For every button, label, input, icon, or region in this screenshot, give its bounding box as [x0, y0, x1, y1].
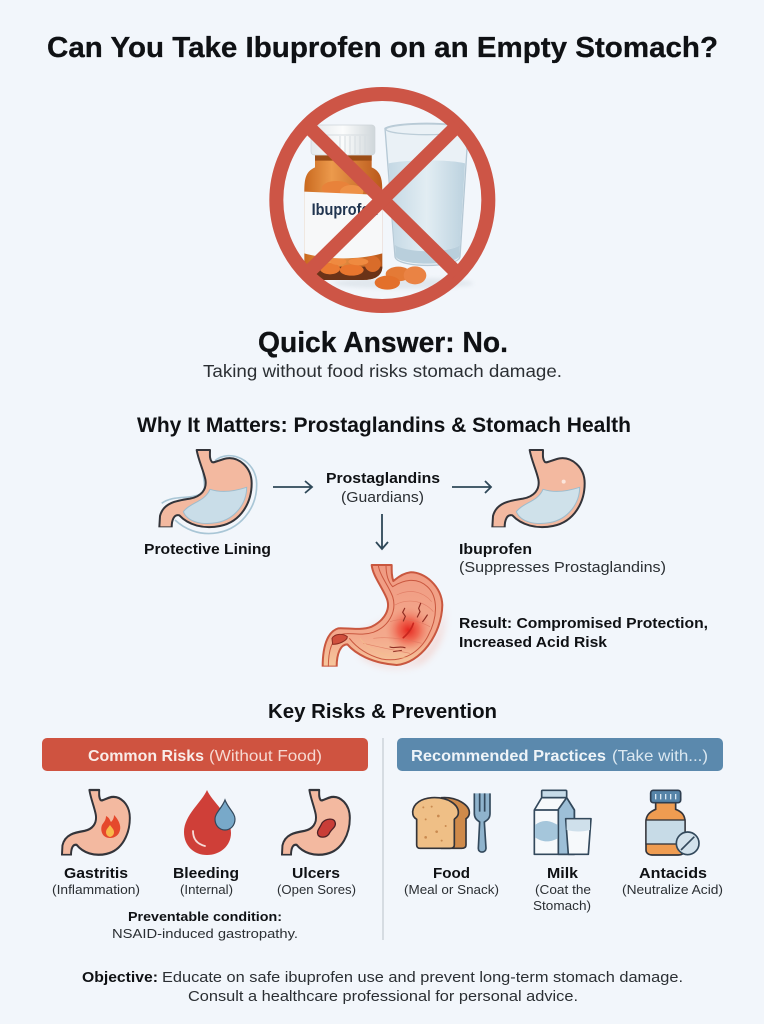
banner: recommended practices: (Take with...) [612, 748, 708, 765]
icon: damaged inflamed stomach [321, 565, 444, 669]
label: food: Food [433, 865, 470, 882]
label: ulcers [277, 865, 356, 897]
heading: why it matters: Why It Matters: Prostaglandins & Stomach Health [137, 414, 631, 437]
footer: objective [82, 970, 683, 1005]
icon: stomach with thinned lining [491, 450, 585, 530]
label: ibuprofen suppresses prostaglandins [459, 542, 666, 576]
panel: recommended practices [397, 738, 723, 913]
quick answer: Quick Answer: No. [258, 327, 508, 359]
quick answer: Taking without food risks stomach damage. [203, 361, 562, 381]
banner: recommended practices [397, 738, 723, 771]
quick answer [203, 327, 562, 381]
label: gastritis [52, 865, 140, 897]
column divider [382, 738, 384, 940]
result text [459, 616, 708, 651]
icon: antacid bottle and tablet [646, 790, 699, 855]
note: preventable condition [112, 909, 298, 941]
footer: objective: Objective: [82, 970, 158, 986]
label: bleeding: Bleeding [173, 865, 239, 882]
label: milk: (Coat the [535, 883, 591, 897]
icon: water glass [385, 123, 468, 265]
label: milk: Milk [547, 865, 579, 882]
heading: key risks and prevention: Key Risks & Prevention [268, 701, 497, 723]
prostaglandins label: (Guardians) [341, 490, 424, 506]
icon: blood drops [184, 790, 235, 855]
icon: prohibition sign [276, 94, 488, 306]
label: ulcers: Ulcers [292, 865, 340, 882]
arrow: prostaglandins down to damaged stomach [376, 514, 388, 549]
icon: gastritis stomach with flame [60, 790, 130, 858]
icon: ulcer stomach [280, 790, 350, 858]
label: food: (Meal or Snack) [404, 883, 499, 897]
hero: ibuprofen bottle and water crossed out [276, 94, 488, 306]
label: ibuprofen suppresses prostaglandins: Ibuprofen [459, 542, 532, 558]
footer: objective: Educate on safe ibuprofen use and prevent long-term stomach damage. [162, 970, 683, 986]
title: Can You Take Ibuprofen on an Empty Stomach? [47, 32, 718, 64]
icon: healthy stomach with protective lining [158, 450, 257, 534]
note: preventable condition: NSAID-induced gastropathy. [112, 926, 298, 941]
prostaglandins label: Prostaglandins [326, 471, 440, 487]
panel: common risks [42, 738, 368, 941]
icon: pill bottle [304, 125, 382, 280]
icon: milk carton and glass [534, 790, 591, 854]
label: protective lining: Protective Lining [144, 542, 271, 558]
result text: Increased Acid Risk [459, 635, 608, 651]
label: milk [533, 865, 591, 913]
label: antacids [622, 865, 723, 897]
label: bleeding: (Internal) [180, 883, 233, 897]
icon: loose tablets [375, 266, 426, 290]
banner: recommended practices: Recommended Practices [411, 748, 606, 765]
label: gastritis: (Inflammation) [52, 883, 140, 897]
prostaglandins label [326, 471, 440, 506]
icon: bread and fork [413, 793, 490, 852]
arrow: prostaglandins to ibuprofen [452, 481, 491, 493]
banner: common risks: Common Risks [88, 748, 204, 765]
label: food [404, 865, 499, 897]
shadow under bottle and glass [333, 278, 473, 289]
label: ibuprofen suppresses prostaglandins: (Suppresses Prostaglandins) [459, 560, 666, 576]
note: preventable condition: Preventable condition: [128, 909, 282, 924]
label: milk: Stomach) [533, 899, 591, 913]
banner: common risks: (Without Food) [209, 748, 322, 765]
banner: common risks [42, 738, 368, 771]
label: bleeding [173, 865, 239, 897]
label: gastritis: Gastritis [64, 865, 128, 882]
label: antacids: (Neutralize Acid) [622, 883, 723, 897]
bottle label text: Ibuprofen [312, 200, 378, 219]
arrow: lining to prostaglandins [273, 481, 312, 493]
result text: Result: Compromised Protection, [459, 616, 708, 632]
footer: objective: Consult a healthcare professional for personal advice. [188, 989, 578, 1005]
label: antacids: Antacids [639, 865, 707, 882]
label: ulcers: (Open Sores) [277, 883, 356, 897]
